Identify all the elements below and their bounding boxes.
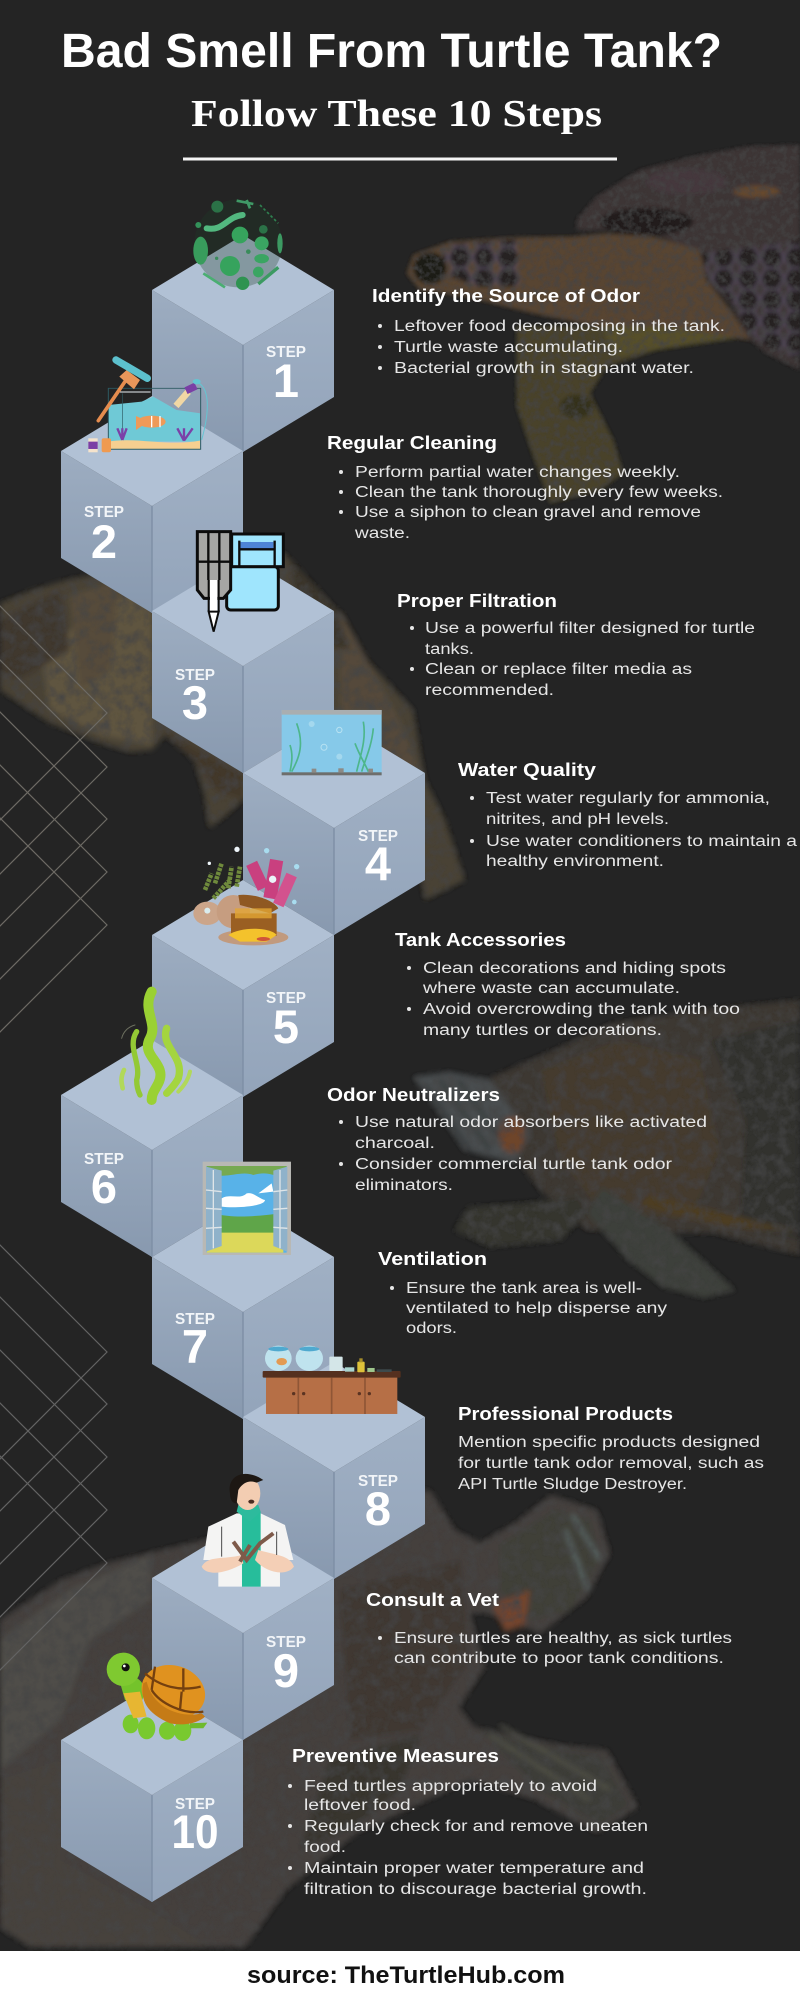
step 5 text: many turtles or decorations. [423,1022,662,1039]
step 2 text: Perform partial water changes weekly. [355,464,680,481]
step 7 text: Ensure the tank area is well- [406,1280,642,1297]
step 10 text: Preventive Measures [292,1746,499,1766]
step 5 text: Avoid overcrowding the tank with too [423,1001,740,1018]
step 7 label [175,1311,215,1373]
step 1 [152,199,725,452]
step 1 text: Bacterial growth in stagnant water. [394,360,694,377]
step 10 [61,1653,648,1902]
step 2 text: Clean the tank thoroughly every few weeks. [355,484,723,501]
step 6 [61,992,707,1257]
step 9 label: 9 [273,1644,299,1697]
step 9 text: Consult a Vet [366,1590,499,1610]
cube 3 [152,556,334,773]
step 4 label: STEP [358,828,398,845]
step 2 label: STEP [84,504,124,521]
source band: source: TheTurtleHub.com [247,1962,565,1989]
step 4 text: healthy environment. [486,853,664,870]
step 6 text: Consider commercial turtle tank odor [355,1156,672,1173]
cube 9 [152,1523,334,1740]
step 9 text: can contribute to poor tank conditions. [394,1650,724,1667]
step 3 text: tanks. [425,641,474,658]
step 4 text: Use water conditioners to maintain a [486,833,797,850]
step 8 text: for turtle tank odor removal, such as [458,1455,764,1472]
step 4 text [458,760,797,870]
step 6 text [327,1085,707,1194]
step 5 label: 5 [273,1000,299,1053]
icon: filter [197,532,283,632]
step 5 text: where waste can accumulate. [422,980,680,997]
step 6 label: STEP [84,1151,124,1168]
step 8 label: STEP [358,1473,398,1490]
step 9 label: STEP [266,1634,306,1651]
step 7 label: STEP [175,1311,215,1328]
step 1 label [266,344,306,407]
step 6 label [84,1151,124,1213]
step 5 [152,847,740,1097]
step 5 label: STEP [266,990,306,1007]
step 5 text: Tank Accessories [395,930,566,950]
photo: large slider turtle [0,1490,638,1947]
step 9 text: Ensure turtles are healthy, as sick turtles [394,1630,732,1647]
icon: open window [203,1162,291,1255]
icon: tank decorations [193,847,299,945]
cube 7 [152,1202,334,1419]
icon: bacteria [193,199,283,290]
step 2 [61,360,723,613]
step 5 text [395,930,740,1039]
step 2 label: 2 [91,515,117,568]
decorative lines: lower [0,1235,107,1680]
cube 4 [243,718,425,935]
cube 1 [152,235,334,452]
step 10 text: Regularly check for and remove uneaten [304,1818,648,1835]
step 10 text [288,1746,648,1898]
cube 2 [61,396,243,613]
cube 6 [61,1040,243,1257]
step 6 text: Odor Neutralizers [327,1085,500,1105]
step 8 text: Mention specific products designed [458,1434,760,1451]
step 9 label [266,1634,306,1697]
step 10 text: filtration to discourage bacterial growth. [304,1881,647,1898]
step 1 text: Leftover food decomposing in the tank. [394,318,725,335]
step 1 label: 1 [273,354,299,407]
step 4 [243,710,797,935]
icon: cartoon turtle [107,1653,212,1741]
step 4 text: Water Quality [458,760,596,780]
step 8 text: API Turtle Sludge Destroyer. [458,1476,687,1493]
step 7 label: 7 [182,1320,208,1373]
icon: products cabinet [263,1346,401,1414]
step 2 label [84,504,124,568]
step 2 text [327,433,723,542]
step 3 text [397,591,755,699]
step 10 label: 10 [172,1805,218,1858]
photo: red-eared slider [413,1000,800,1298]
cube 10 [61,1685,243,1902]
step 8 label [358,1473,398,1535]
step 7 text [378,1249,667,1337]
step 6 text: Use natural odor absorbers like activated [355,1114,707,1131]
step 4 label: 4 [365,837,391,890]
step 6 text: eliminators. [355,1177,453,1194]
step 7 text: odors. [406,1320,457,1337]
cube 8 [243,1362,425,1579]
title: Bad Smell From Turtle Tank? [61,25,722,78]
title divider [183,158,617,160]
step 4 text: Test water regularly for ammonia, [486,790,770,807]
step 7 text: Ventilation [378,1249,487,1269]
step 8 label: 8 [365,1482,391,1535]
step 3 text: Proper Filtration [397,591,557,611]
step 8 text [458,1404,764,1493]
step 10 text: Maintain proper water temperature and [304,1860,644,1877]
step 3 [152,532,755,773]
step 6 label: 6 [91,1160,117,1213]
step 2 text: Regular Cleaning [327,433,497,453]
step 1 label: STEP [266,344,306,361]
step 5 text: Clean decorations and hiding spots [423,960,726,977]
step 1 text: Identify the Source of Odor [372,286,640,306]
photo: tortoise [0,552,465,900]
step 9 [152,1474,732,1740]
step 10 text: food. [304,1839,346,1856]
icon: odor waves [121,992,190,1100]
step 4 label [358,828,398,890]
step 6 text: charcoal. [355,1135,435,1152]
subtitle: Follow These 10 Steps [191,93,602,135]
step 3 text: recommended. [425,682,554,699]
step 2 text: waste. [354,525,410,542]
cube 5 [152,880,334,1097]
icon: aquarium [282,710,382,775]
step 1 text: Turtle waste accumulating. [394,339,623,356]
step 3 label: 3 [182,676,208,729]
step 1 text [372,286,725,377]
step 2 text: Use a siphon to clean gravel and remove [355,504,701,521]
step 5 label [266,990,306,1053]
step 3 text: Clean or replace filter media as [425,661,692,678]
source band [0,1951,800,2000]
step 8 [243,1346,764,1579]
photo: sea turtle [407,145,800,503]
icon: tank cleaning [88,360,207,452]
step 4 text: nitrites, and pH levels. [486,811,669,828]
icon: vet [202,1474,294,1587]
decorative lines: upper [0,596,107,1042]
step 3 text: Use a powerful filter designed for turtle [425,620,755,637]
step 10 text: leftover food. [304,1797,416,1814]
step 7 [152,1162,667,1419]
step 10 text: Feed turtles appropriately to avoid [304,1778,597,1795]
step 9 text [366,1590,732,1667]
step 10 label: STEP [175,1796,215,1813]
step 3 label: STEP [175,667,215,684]
step 7 text: ventilated to help disperse any [406,1300,667,1317]
step 8 text: Professional Products [458,1404,673,1424]
step 3 label [175,667,215,729]
